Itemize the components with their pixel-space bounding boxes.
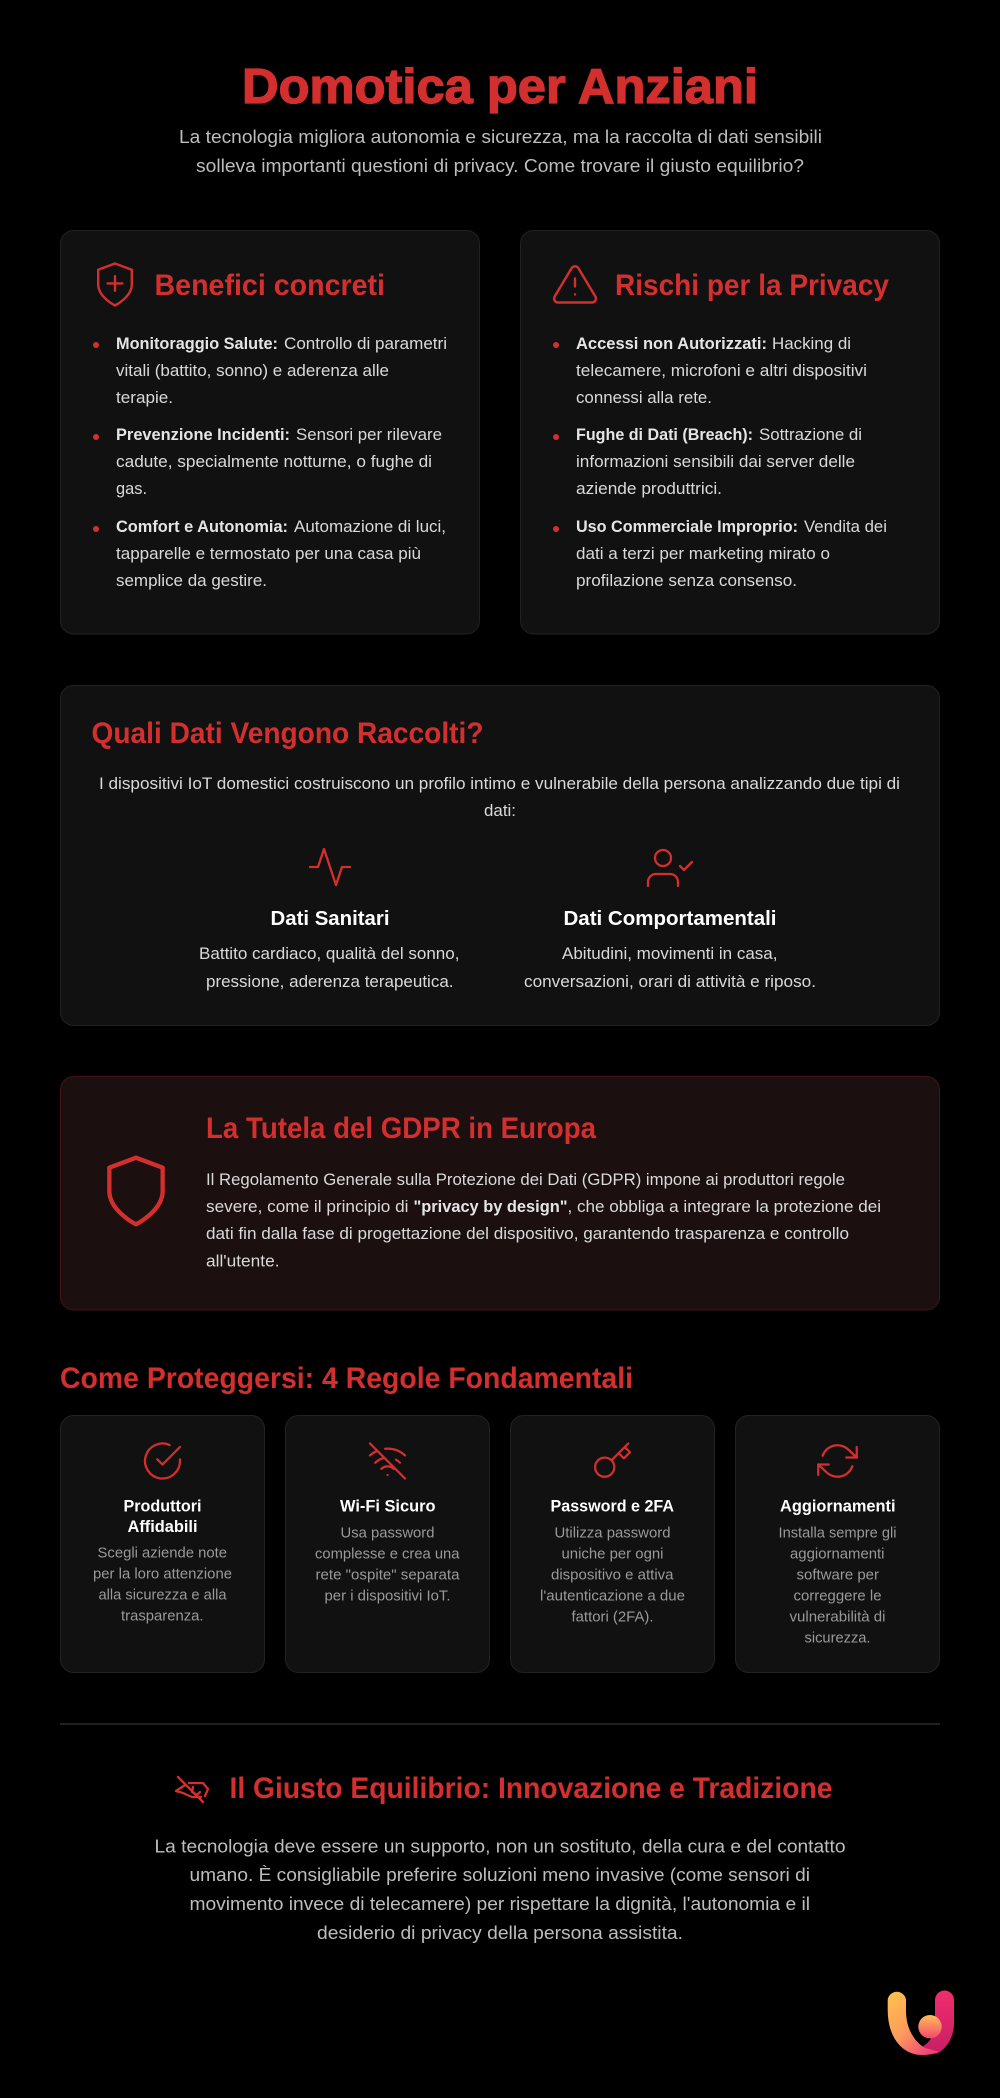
list item: fughe: Fughe di Dati (Breach):: [576, 426, 753, 444]
column: dati comportamentali: Dati Comportamentali: [564, 908, 776, 930]
list item: fughe: [553, 426, 862, 498]
list item: accessi: Accessi non Autorizzati:: [576, 335, 767, 353]
logo: [888, 1990, 954, 2055]
list item: prevenzione: [93, 426, 442, 498]
panel: rischi per la privacy: [520, 230, 940, 634]
card: password e 2FA: fattori (2FA).: [572, 1610, 654, 1626]
card: wi-fi sicuro: [286, 1416, 490, 1672]
card: aggiornamenti: sicurezza.: [804, 1630, 870, 1646]
heading: Quali Dati Vengono Raccolti?: [92, 717, 484, 750]
section: il giusto equilibrio: [154, 1772, 846, 1943]
list item: monitoraggio: Controllo di parametri: [284, 335, 447, 353]
icon: user check: [648, 850, 692, 886]
intro text: dati:: [484, 802, 516, 820]
paragraph: all'utente.: [206, 1252, 280, 1270]
paragraph: , che obbliga a integrare la protezione dei: [568, 1198, 881, 1216]
list item: uso commerciale: profilazione senza consenso.: [576, 572, 797, 590]
card: produttori affidabili: [60, 1416, 264, 1672]
paragraph: [154, 1836, 846, 1943]
card: aggiornamenti: [736, 1416, 940, 1672]
card: password e 2FA: dispositivo e attiva: [551, 1568, 674, 1584]
intro text: [99, 775, 900, 820]
subtitle: [179, 126, 822, 176]
panel: benefici concreti: [60, 230, 480, 634]
card: produttori affidabili: Affidabili: [128, 1518, 198, 1536]
section heading: come proteggersi: Come Proteggersi: 4 Regole Fondamentali: [60, 1362, 633, 1395]
paragraph: dati fin dalla fase di progettazione del dispositivo, garantendo trasparenza e controllo: [206, 1225, 849, 1243]
icon: shield: [109, 1158, 163, 1224]
card: wi-fi sicuro: rete "ospite" separata: [316, 1568, 460, 1584]
column: dati comportamentali: Abitudini, movimenti in casa,: [562, 945, 778, 963]
card: password e 2FA: Password e 2FA: [550, 1498, 674, 1516]
list item: monitoraggio: Monitoraggio Salute:: [116, 335, 278, 353]
paragraph: severe, come il principio di: [206, 1198, 408, 1216]
list item: prevenzione: Prevenzione Incidenti:: [116, 426, 290, 444]
card: password e 2FA: uniche per ogni: [562, 1546, 664, 1562]
card: produttori affidabili: Produttori: [124, 1498, 202, 1516]
heading: La Tutela del GDPR in Europa: [206, 1112, 596, 1145]
card: produttori affidabili: per la loro attenzione: [93, 1566, 232, 1582]
intro text: I dispositivi IoT domestici costruiscono un profilo intimo e vulnerabile della persona analizzando due tipi di: [99, 775, 900, 793]
card: password e 2FA: Utilizza password: [554, 1526, 670, 1542]
card: produttori affidabili: alla sicurezza e alla: [98, 1588, 226, 1604]
header: [179, 60, 822, 176]
card: aggiornamenti: correggere le: [794, 1588, 882, 1604]
icon: shield plus: [98, 264, 132, 306]
card: wi-fi sicuro: complesse e crea una: [315, 1546, 460, 1562]
paragraph: La tecnologia deve essere un supporto, non un sostituto, della cura e del contatto: [154, 1836, 846, 1856]
list item: comfort: Automazione di luci,: [294, 518, 446, 536]
list item: monitoraggio: [93, 335, 447, 407]
panel: tutela del GDPR: [60, 1076, 940, 1310]
card: password e 2FA: [510, 1416, 714, 1672]
card: produttori affidabili: trasparenza.: [121, 1608, 204, 1624]
icon: key: [595, 1444, 630, 1477]
column: dati sanitari: pressione, aderenza terapeutica.: [206, 973, 454, 991]
heading: Il Giusto Equilibrio: Innovazione e Tradizione: [230, 1772, 832, 1805]
paragraph: [206, 1171, 881, 1270]
subtitle: La tecnologia migliora autonomia e sicurezza, ma la raccolta di dati sensibili: [179, 126, 822, 147]
card: wi-fi sicuro: per i dispositivi IoT.: [324, 1588, 450, 1604]
card: aggiornamenti: Installa sempre gli: [778, 1526, 896, 1542]
card: aggiornamenti: aggiornamenti: [790, 1546, 884, 1562]
list item: accessi: connessi alla rete.: [576, 389, 712, 407]
card: aggiornamenti: Aggiornamenti: [780, 1498, 896, 1516]
paragraph: desiderio di privacy della persona assistita.: [317, 1922, 683, 1943]
list item: monitoraggio: vitali (battito, sonno) e aderenza alle: [116, 362, 389, 380]
icon: refresh: [818, 1445, 857, 1477]
column: dati sanitari: Battito cardiaco, qualità del sonno,: [199, 945, 460, 963]
column: dati comportamentali: [524, 850, 816, 991]
card: wi-fi sicuro: Usa password: [340, 1526, 434, 1542]
list item: fughe: Sottrazione di: [759, 426, 862, 444]
paragraph: "privacy by design": [414, 1198, 568, 1216]
list item: comfort: Comfort e Autonomia:: [116, 518, 288, 536]
list item: monitoraggio: terapie.: [116, 389, 173, 407]
list item: uso commerciale: Vendita dei: [804, 518, 887, 536]
column: dati comportamentali: conversazioni, orari di attività e riposo.: [524, 973, 816, 991]
list item: accessi: [553, 335, 867, 407]
list item: fughe: informazioni sensibili dai server delle: [576, 453, 855, 471]
card: aggiornamenti: vulnerabilità di: [790, 1610, 886, 1626]
list item: comfort: semplice da gestire.: [116, 572, 267, 590]
paragraph: Il Regolamento Generale sulla Protezione dei Dati (GDPR) impone ai produttori regole: [206, 1171, 845, 1189]
title: Domotica per Anziani: [242, 60, 758, 114]
list item: accessi: Hacking di: [772, 335, 851, 353]
card: password e 2FA: l'autenticazione a due: [540, 1588, 685, 1604]
icon: check circle: [145, 1443, 180, 1478]
heading: Rischi per la Privacy: [615, 269, 889, 302]
card: aggiornamenti: software per: [796, 1568, 879, 1584]
card: wi-fi sicuro: Wi-Fi Sicuro: [340, 1498, 436, 1516]
icon: eye off: [176, 1777, 208, 1802]
list item: comfort: [93, 518, 446, 590]
list item: prevenzione: gas.: [116, 480, 147, 498]
paragraph: umano. È consigliabile preferire soluzioni meno invasive (come sensori di: [190, 1864, 810, 1885]
list item: fughe: aziende produttrici.: [576, 480, 722, 498]
subtitle: solleva importanti questioni di privacy. Come trovare il giusto equilibrio?: [196, 155, 804, 176]
list item: prevenzione: cadute, specialmente notturne, o fughe di: [116, 453, 432, 471]
card: produttori affidabili: Scegli aziende note: [98, 1546, 227, 1562]
icon: activity pulse: [310, 849, 350, 885]
panel: quali dati vengono raccolti: [60, 686, 940, 1026]
icon: warning triangle: [554, 266, 596, 302]
list item: uso commerciale: dati a terzi per marketing mirato o: [576, 545, 830, 563]
list item: comfort: tapparelle e termostato per una casa più: [116, 545, 421, 563]
list item: prevenzione: Sensori per rilevare: [296, 426, 442, 444]
list item: accessi: telecamere, microfoni e altri dispositivi: [576, 362, 867, 380]
heading: Benefici concreti: [154, 269, 385, 302]
list item: uso commerciale: Uso Commerciale Improprio:: [576, 518, 798, 536]
paragraph: movimento invece di telecamere) per rispettare la dignità, l'autonomia e il: [190, 1893, 810, 1914]
column: dati sanitari: Dati Sanitari: [270, 908, 390, 930]
icon: wifi off: [370, 1444, 405, 1478]
column: dati sanitari: [199, 849, 460, 991]
list item: uso commerciale: [553, 518, 887, 590]
